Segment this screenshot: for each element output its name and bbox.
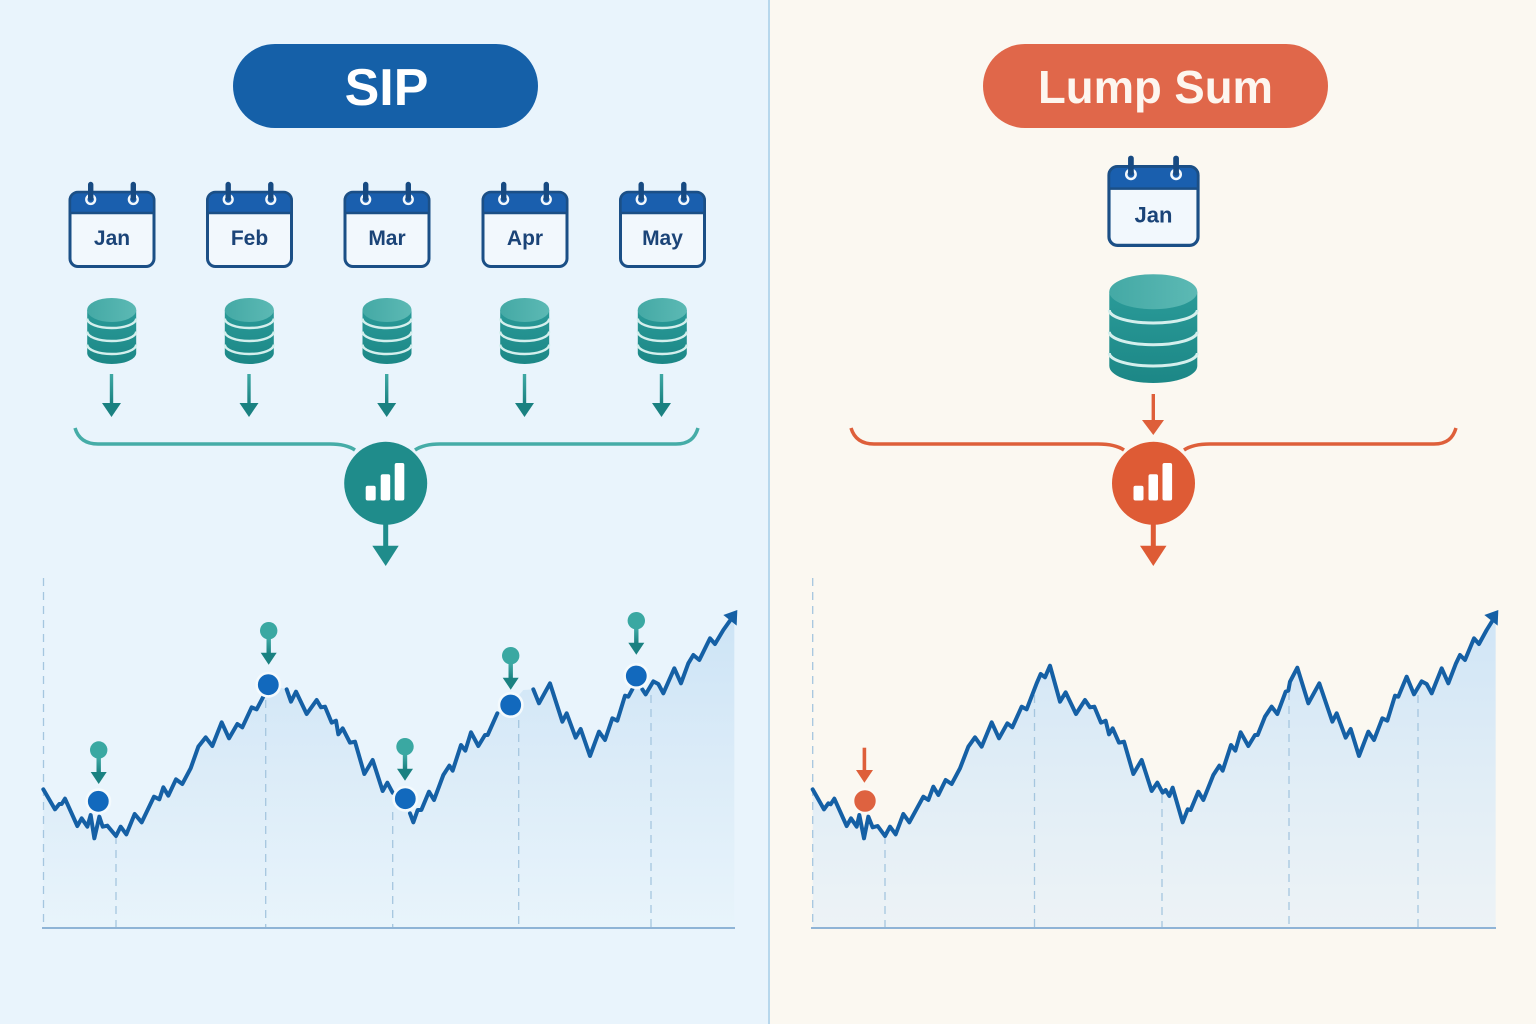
calendar: Lump Sum Jan: [1109, 158, 1198, 245]
price line: [813, 610, 1498, 838]
arrow: Jan down: [102, 374, 121, 417]
marker: May purchase: [625, 612, 648, 688]
chart baseline: [811, 927, 1496, 929]
heading: SIP pill: [233, 44, 538, 128]
calendar: May: May: [642, 227, 683, 250]
marker: Lump Sum single purchase: [853, 748, 877, 813]
panel: Lump Sum background: [769, 0, 1536, 1024]
calendar: Feb: [208, 184, 292, 266]
month guide lines: [813, 578, 1418, 928]
calendar: Apr: Apr: [507, 227, 543, 250]
heading: SIP pill: SIP: [345, 59, 428, 117]
arrow: May down: [652, 374, 671, 417]
icon: Lump Sum chart circle with arrow: [1112, 442, 1195, 566]
arrow: Feb down: [240, 374, 258, 417]
chart: SIP market line: [42, 578, 737, 929]
price line: [43, 610, 737, 838]
marker: Mar purchase: [394, 738, 417, 810]
calendar: May: [620, 184, 704, 266]
arrow: Lump Sum down to bracket: [1142, 394, 1164, 435]
marker: Apr purchase: [499, 647, 522, 717]
calendar: Jan: [70, 184, 154, 266]
marker: Feb purchase: [257, 622, 280, 696]
panel: SIP background: [0, 0, 769, 1024]
calendar: Mar: Mar: [368, 227, 406, 250]
heading: Lump Sum pill: [983, 44, 1328, 128]
icon: coin stack Mar: [362, 298, 412, 364]
calendar: Lump Sum Jan: Jan: [1135, 202, 1172, 228]
bracket: SIP merge: [75, 428, 698, 450]
chart baseline: [42, 927, 735, 929]
calendar: Mar: [345, 184, 429, 266]
calendar: Feb: Feb: [231, 227, 268, 250]
arrow: Mar down: [377, 374, 396, 417]
heading: Lump Sum pill: Lump Sum: [1038, 61, 1273, 113]
chart area fill: [813, 617, 1496, 928]
chart area fill: [43, 617, 734, 928]
marker: Jan purchase: [87, 741, 110, 813]
bracket: Lump Sum merge: [851, 428, 1456, 450]
arrow: Apr down: [515, 374, 534, 417]
icon: coin stack May: [638, 298, 687, 364]
month guide lines: [44, 578, 651, 928]
icon: SIP chart circle with arrow: [344, 442, 427, 566]
icon: coin stack Apr: [500, 298, 549, 364]
icon: coin stack Jan: [87, 298, 136, 364]
icon: coin stack Feb: [225, 298, 274, 364]
icon: large coin stack: [1109, 274, 1197, 383]
calendar: Apr: [483, 184, 567, 266]
calendar: Jan: Jan: [94, 227, 130, 250]
chart: Lump Sum market line: [811, 578, 1498, 929]
